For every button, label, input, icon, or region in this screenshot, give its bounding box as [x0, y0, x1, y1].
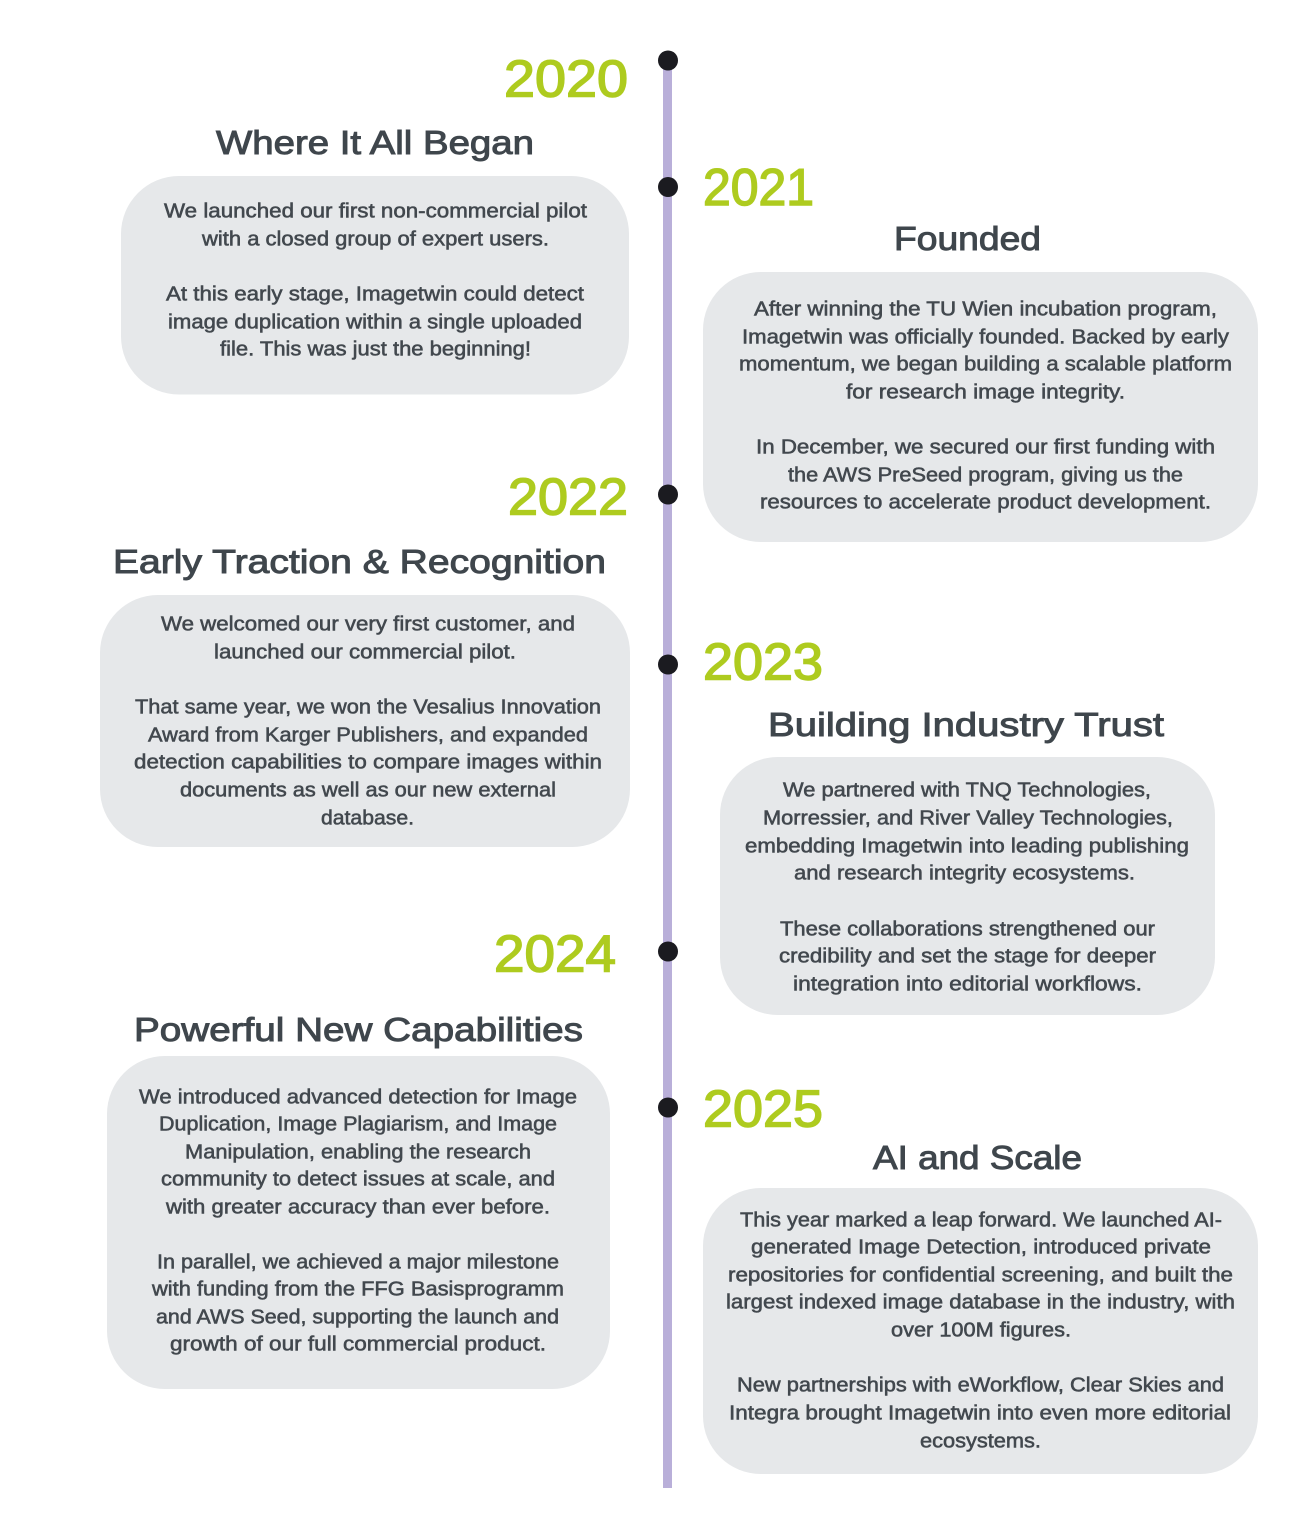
heading: Founded: Founded: [894, 220, 1041, 257]
panel: 2024 Powerful New Capabilities: [107, 926, 616, 1389]
heading: Powerful New Capabilities: Powerful New Capabilities: [134, 1011, 583, 1048]
text card: 2023: credibility and set the stage for deeper: [779, 946, 1156, 968]
text card: 2024: [107, 1056, 610, 1389]
text card: 2021: resources to accelerate product development.: [760, 492, 1211, 514]
panel: 2020 Where It All Began: [121, 50, 629, 394]
text card: 2020: image duplication within a single uploaded: [168, 312, 582, 334]
text card: 2024: and AWS Seed, supporting the launch and: [156, 1306, 559, 1328]
text card: 2022: detection capabilities to compare images within: [134, 752, 602, 774]
text card: 2021: [703, 272, 1258, 542]
year: 2020: 2020: [504, 50, 628, 108]
text card: 2022: Award from Karger Publishers, and expanded: [148, 724, 588, 746]
text card: 2021: for research image integrity.: [846, 382, 1125, 404]
timeline dot: 2025: [658, 1098, 678, 1118]
text card: 2020: We launched our first non-commercial pilot: [164, 200, 587, 222]
text card: 2022: [100, 595, 630, 847]
heading: Early Traction & Recognition: Early Traction & Recognition: [113, 543, 606, 580]
text card: 2024: with funding from the FFG Basisprogramm: [151, 1278, 564, 1300]
timeline dot: 2022: [658, 484, 678, 504]
text card: 2024: Duplication, Image Plagiarism, and Image: [159, 1114, 557, 1136]
text card: 2024: with greater accuracy than ever before.: [165, 1196, 550, 1218]
text card: 2023: We partnered with TNQ Technologies,: [783, 780, 1151, 802]
text card: 2023: and research integrity ecosystems.: [794, 862, 1135, 884]
text card: 2025: over 100M figures.: [891, 1320, 1071, 1342]
text card: 2022: launched our commercial pilot.: [214, 642, 516, 664]
year: 2023: 2023: [703, 634, 823, 692]
text card: 2025: [703, 1188, 1258, 1474]
panel: 2021 Founded: [703, 159, 1258, 542]
text card: 2023: Morressier, and River Valley Technologies,: [763, 808, 1173, 830]
text card: 2024: We introduced advanced detection for Image: [139, 1086, 577, 1108]
text card: 2021: Imagetwin was officially founded. Backed by early: [742, 326, 1229, 348]
text card: 2023: integration into editorial workflows.: [793, 974, 1142, 996]
text card: 2020: with a closed group of expert users.: [201, 228, 549, 250]
text card: 2025: repositories for confidential screening, and built the: [728, 1264, 1233, 1286]
heading: AI and Scale: AI and Scale: [873, 1139, 1082, 1176]
text card: 2024: Manipulation, enabling the research: [185, 1142, 531, 1164]
text card: 2025: Integra brought Imagetwin into even more editorial: [729, 1402, 1231, 1424]
panel: 2023 Building Industry Trust: [703, 634, 1215, 1015]
text card: 2025: largest indexed image database in the industry, with: [726, 1292, 1235, 1314]
text card: 2021: momentum, we began building a scalable platform: [739, 354, 1232, 376]
text card: 2021: In December, we secured our first funding with: [756, 436, 1215, 458]
text card: 2023: [720, 757, 1215, 1015]
text card: 2022: We welcomed our very first customer, and: [161, 614, 575, 636]
text card: 2021: the AWS PreSeed program, giving us the: [788, 464, 1183, 486]
heading: Where It All Began: Where It All Began: [216, 124, 534, 161]
panel: 2022 Early Traction & Recognition: [100, 468, 630, 847]
year: 2022: 2022: [508, 468, 628, 526]
text card: 2024: In parallel, we achieved a major milestone: [157, 1252, 559, 1274]
timeline dot: 2020: [658, 50, 678, 70]
text card: 2023: These collaborations strengthened our: [780, 918, 1155, 940]
text card: 2022: documents as well as our new external: [180, 780, 556, 802]
text card: 2023: embedding Imagetwin into leading publishing: [745, 836, 1189, 858]
year: 2024: 2024: [494, 926, 616, 984]
text card: 2020: [121, 176, 629, 394]
text card: 2025: This year marked a leap forward. We launched AI-: [740, 1210, 1222, 1232]
timeline axis: [658, 50, 678, 1488]
text card: 2022: database.: [321, 808, 414, 830]
timeline dot: 2021: [658, 177, 678, 197]
text card: 2022: That same year, we won the Vesalius Innovation: [135, 696, 601, 718]
timeline dot: 2024: [658, 942, 678, 962]
text card: 2020: file. This was just the beginning!: [220, 338, 531, 360]
text card: 2024: growth of our full commercial product.: [170, 1334, 546, 1356]
panel: 2025 AI and Scale: [703, 1080, 1258, 1474]
year: 2021: 2021: [703, 159, 814, 217]
text card: 2025: ecosystems.: [920, 1430, 1041, 1452]
year: 2025: 2025: [703, 1080, 823, 1138]
heading: Building Industry Trust: Building Industry Trust: [768, 706, 1164, 743]
text card: 2024: community to detect issues at scale, and: [161, 1168, 555, 1190]
text card: 2025: New partnerships with eWorkflow, Clear Skies and: [737, 1374, 1224, 1396]
text card: 2020: At this early stage, Imagetwin could detect: [166, 284, 584, 306]
text card: 2021: After winning the TU Wien incubation program,: [754, 298, 1217, 320]
timeline dot: 2023: [658, 654, 678, 674]
text card: 2025: generated Image Detection, introduced private: [751, 1236, 1211, 1258]
